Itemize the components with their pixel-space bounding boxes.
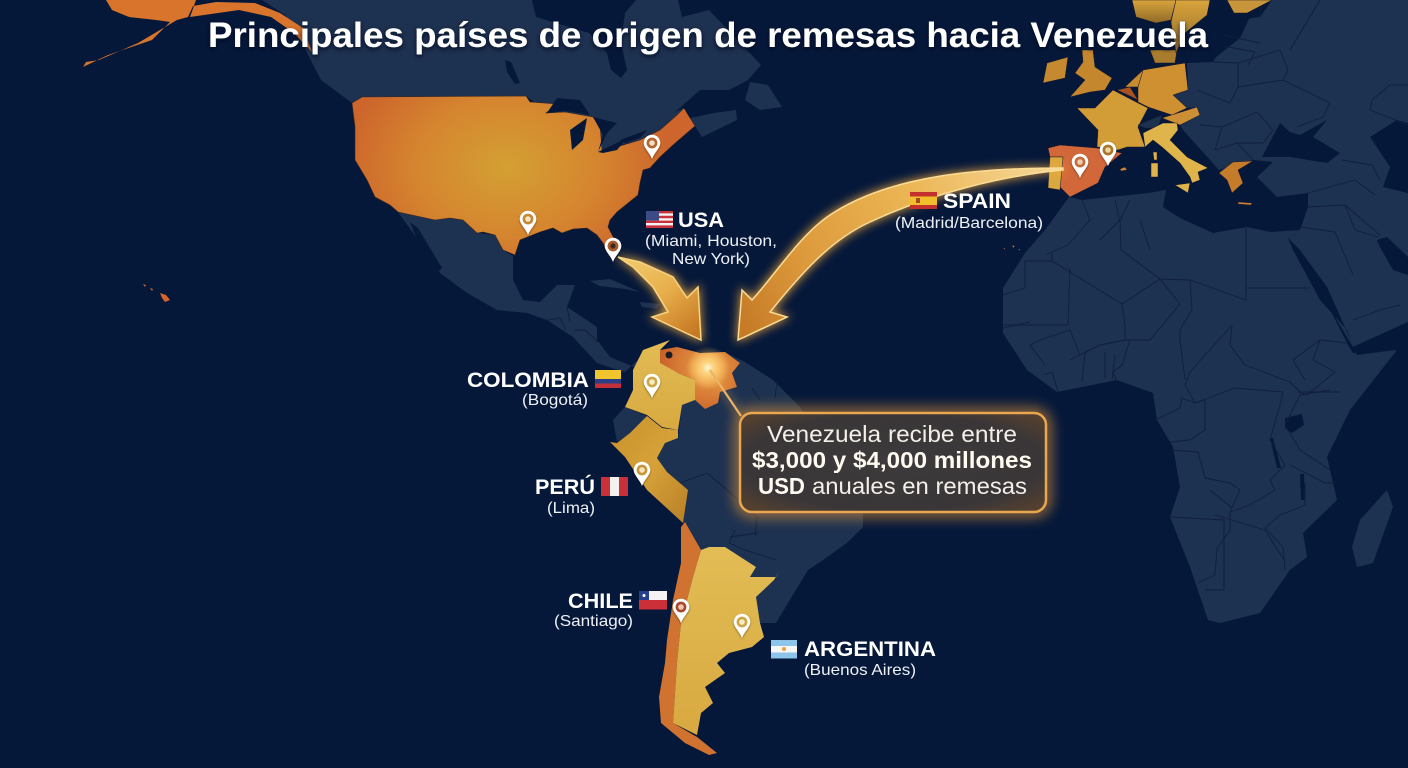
Peru xyxy=(610,416,688,523)
Great Lakes xyxy=(547,98,647,153)
highlighted countries: Europe xyxy=(1003,0,1272,251)
label: USA: (Miami, Houston, xyxy=(645,233,777,250)
Gulf of St Lawrence xyxy=(675,90,729,118)
base map: non-highlighted land xyxy=(262,0,1408,623)
flag: Spain xyxy=(910,192,937,209)
label: USA xyxy=(645,209,777,268)
label: Chile xyxy=(554,590,667,630)
highlighted country: USA xyxy=(83,0,729,302)
Colombia xyxy=(625,340,695,430)
label: Argentina: (Buenos Aires) xyxy=(804,662,916,679)
callout: annual remittances xyxy=(740,413,1046,512)
flag: Chile xyxy=(639,591,667,610)
pin: Houston xyxy=(520,211,536,235)
flag: Argentina xyxy=(771,640,797,658)
arrow: USA to Venezuela xyxy=(618,257,701,340)
Venezuela xyxy=(660,347,740,409)
label: USA: New York) xyxy=(672,251,750,268)
pin: Buenos Aires xyxy=(734,614,750,638)
Argentina xyxy=(673,547,780,735)
pin: Barcelona xyxy=(1100,142,1116,166)
pin: Bogotá xyxy=(644,374,660,398)
label: Perú xyxy=(535,475,628,517)
pin: Santiago xyxy=(673,599,689,623)
flag: Colombia xyxy=(595,370,621,388)
Hawaii xyxy=(143,284,170,302)
label: Spain xyxy=(895,190,1043,232)
flag: USA xyxy=(646,211,673,228)
label: Perú: (Lima) xyxy=(547,500,595,517)
callout: annual remittances: $3,000 y $4,000 millones xyxy=(752,447,1032,473)
title: Principales países de origen de remesas hacia Venezuela xyxy=(208,16,1209,55)
label: Colombia xyxy=(467,369,621,409)
country borders on base map xyxy=(548,0,1408,590)
inland seas xyxy=(410,0,1408,500)
Alaska xyxy=(83,0,312,67)
label: Perú: PERÚ xyxy=(535,475,595,499)
arrow: Spain to Venezuela xyxy=(738,168,1063,340)
label: Spain: (Madrid/Barcelona) xyxy=(895,215,1043,232)
label: Chile: CHILE xyxy=(568,590,633,613)
pin: Miami xyxy=(605,238,621,262)
label: Argentina xyxy=(771,638,936,679)
callout: annual remittances: anuales en remesas xyxy=(812,473,1027,499)
label: Argentina: ARGENTINA xyxy=(804,638,936,661)
callout connector xyxy=(710,370,741,416)
highlighted countries: South America xyxy=(610,340,780,755)
label: Colombia: COLOMBIA xyxy=(467,369,589,392)
callout: annual remittances: USD xyxy=(758,473,805,499)
callout: annual remittances: Venezuela recibe entre xyxy=(767,421,1017,447)
label: Colombia: (Bogotá) xyxy=(522,392,588,409)
flag: Perú xyxy=(601,477,628,496)
label: USA: USA xyxy=(678,209,724,232)
pin: Lima xyxy=(634,462,650,486)
Venezuela glow point xyxy=(686,346,730,390)
pin: New York xyxy=(644,135,660,159)
label: Chile: (Santiago) xyxy=(554,613,633,630)
label: Spain: SPAIN xyxy=(943,190,1011,213)
Chile xyxy=(659,522,717,755)
pin: Madrid xyxy=(1072,154,1088,178)
